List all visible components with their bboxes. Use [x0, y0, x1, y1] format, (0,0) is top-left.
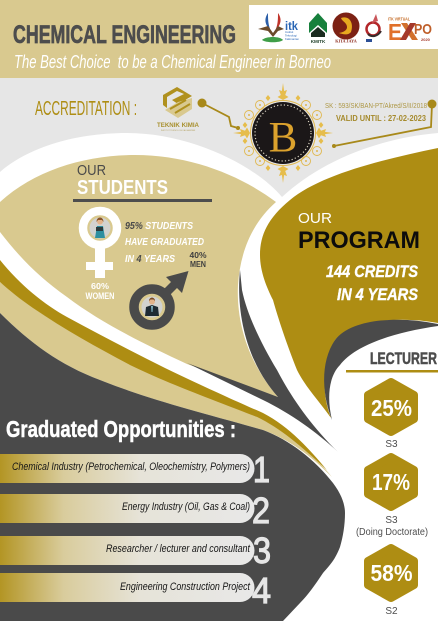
heading: our program	[298, 210, 420, 254]
stat: 17% S3 doing doctorate	[356, 457, 428, 538]
heading: lecturer	[346, 349, 438, 372]
icon: KMITK logo: KMITK	[311, 39, 326, 44]
heading: our program: OUR	[298, 210, 332, 227]
label: men share: 40%	[190, 250, 207, 260]
stat: 58% S2: S2	[385, 606, 398, 617]
stat: 17% S3 doing doctorate: S3	[385, 515, 398, 526]
logo text: itk: Institut	[285, 30, 293, 34]
text: graduation rate: IN 4 YEARS	[125, 253, 175, 265]
list item 3: 3	[253, 530, 271, 571]
list item 2: Energy Industry (Oil, Gas & Coal)	[122, 501, 250, 513]
text: graduation rate: 95% STUDENTS	[125, 220, 193, 232]
heading: our students	[73, 162, 212, 202]
icon: Teknik Kimia logo	[157, 87, 199, 132]
icon: KMITK logo	[309, 13, 327, 44]
icon: man avatar	[142, 296, 162, 318]
logo text: itk: Kalimantan	[285, 37, 299, 41]
decorative lower tan swoosh	[0, 282, 332, 477]
icon: Kita Jaya logo: KITA JAYA	[335, 38, 357, 44]
list item 1	[0, 449, 270, 490]
list item 1: Chemical Industry (Petrochemical, Oleochemistry, Polymers)	[12, 461, 250, 473]
list item 3: Researcher / lecturer and consultant	[106, 543, 251, 555]
background: grey accreditation band	[0, 78, 438, 197]
icon: Teknik Kimia logo: TEKNIK KIMIA	[157, 122, 199, 129]
logo: ITK Virtual Expo 2020: E	[388, 19, 402, 45]
label: women share	[86, 281, 114, 301]
decorative lecturer dark arc	[324, 320, 438, 420]
title: CHEMICAL ENGINEERING	[13, 21, 236, 49]
panel: students background	[0, 155, 278, 397]
list item 4: 4	[252, 570, 271, 611]
list item 4: Engineering Construction Project	[120, 581, 251, 593]
panel: opportunities dark background	[0, 313, 345, 621]
list item 4	[0, 570, 271, 611]
text: program credits	[326, 262, 419, 304]
text: graduation rate: HAVE GRADUATED	[125, 236, 204, 248]
icon: woman avatar	[90, 218, 110, 238]
logo: ITK Virtual Expo 2020: 2020	[421, 37, 431, 42]
heading: accreditation: ACCREDITATION :	[35, 98, 137, 120]
logo text: itk	[285, 19, 299, 41]
decorative dark strip	[187, 270, 338, 452]
heading: our students: STUDENTS	[77, 177, 168, 199]
accreditation details	[325, 101, 427, 123]
stat: 25% S3: S3	[385, 439, 398, 450]
connector: badge to details	[332, 100, 436, 148]
logo: ITK Virtual Expo 2020: ITK VIRTUAL	[388, 16, 410, 22]
list item 1: 1	[253, 449, 270, 490]
icon: G logo	[366, 14, 381, 42]
panel: program	[260, 148, 438, 418]
heading: graduated opportunities: Graduated Opportunities :	[6, 416, 236, 442]
text: program credits: 144 CREDITS	[326, 262, 419, 281]
badge: accreditation grade B: B	[269, 114, 297, 162]
label: men share: MEN	[190, 259, 206, 269]
text: program credits: IN 4 YEARS	[337, 285, 419, 304]
stat: 58% S2	[368, 548, 414, 617]
label: women share: WOMEN	[86, 291, 114, 301]
stat: 25% S3	[368, 382, 414, 450]
stat: 17% S3 doing doctorate: (Doing Doctorate)	[356, 527, 428, 538]
icon: Kita Jaya logo	[332, 12, 360, 44]
stat: 17% S3 doing doctorate: 17%	[372, 469, 410, 495]
icon: ITK emblem	[258, 13, 284, 42]
stat: 25% S3: 25%	[371, 395, 412, 421]
list item 2	[0, 490, 270, 531]
heading: our program: PROGRAM	[298, 227, 420, 254]
connector: logo to badge	[198, 98, 240, 130]
decorative gold swoosh	[0, 260, 327, 470]
stat: 58% S2: 58%	[370, 560, 412, 586]
panel: header band	[0, 0, 438, 78]
logo text: itk: itk	[285, 19, 298, 33]
logo: ITK Virtual Expo 2020: PO	[414, 21, 432, 38]
list item 3	[0, 530, 271, 571]
label: men share	[190, 250, 207, 269]
badge: accreditation grade B	[233, 83, 333, 183]
logo text: itk: Teknologi	[285, 34, 297, 38]
text: graduation rate	[125, 220, 204, 265]
label: women share: 60%	[91, 281, 109, 291]
accreditation details: VALID UNTIL : 27-02-2023	[336, 113, 426, 123]
heading: our students: OUR	[77, 162, 106, 179]
icon: Teknik Kimia logo: INSTITUT TEKNOLOGI KALIMANTAN	[161, 129, 196, 132]
logo: ITK Virtual Expo 2020	[388, 16, 432, 45]
icon: female symbol	[83, 211, 117, 278]
icon: male symbol	[134, 271, 188, 325]
panel: partner logos	[249, 5, 438, 49]
list item 2: 2	[252, 490, 270, 531]
